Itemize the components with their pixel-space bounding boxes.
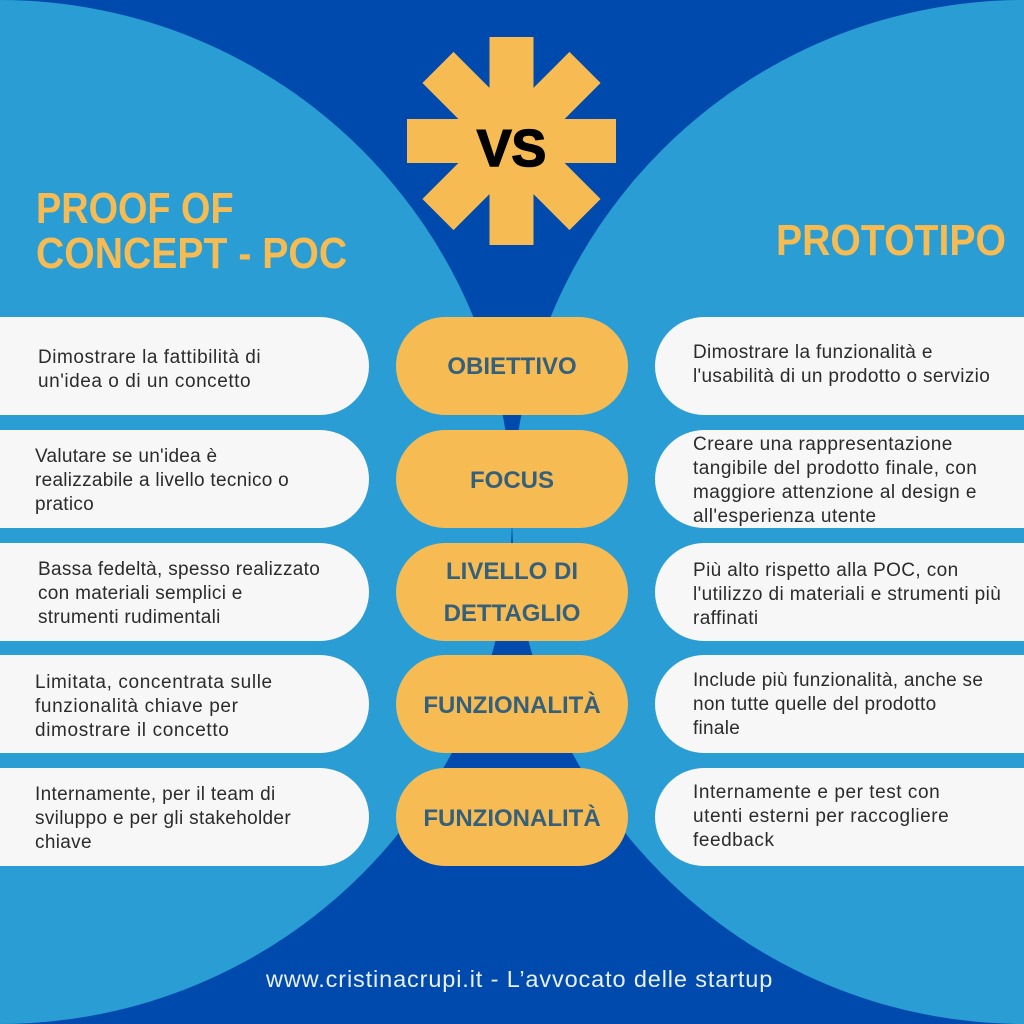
left text: focus: realizzabile a livello tecnico o — [35, 470, 289, 491]
heading: prototipo: PROTOTIPO — [776, 216, 1006, 265]
right text: focus: Creare una rappresentazione — [693, 434, 953, 455]
left text: obiettivo — [38, 347, 261, 392]
center label: obiettivo — [396, 317, 628, 415]
right text: utenti: Internamente e per test con — [693, 782, 940, 803]
right text: funzionalita: finale — [693, 718, 740, 739]
heading: proof of concept — [36, 184, 347, 278]
left pill: utenti — [0, 768, 369, 866]
right text: utenti: utenti esterni per raccogliere — [693, 806, 949, 827]
left pill: funzionalita — [0, 655, 369, 753]
right text: dettaglio: Più alto rispetto alla POC, con — [693, 560, 959, 581]
center label: livello di dettaglio: DETTAGLIO — [444, 600, 580, 627]
left text: dettaglio: strumenti rudimentali — [38, 607, 221, 628]
right text: utenti: feedback — [693, 830, 775, 851]
right text: focus: all'esperienza utente — [693, 506, 877, 527]
right text: funzionalita: Include più funzionalità, anche se — [693, 670, 983, 691]
center label: funzionalita — [396, 655, 628, 753]
right text: dettaglio: raffinati — [693, 608, 758, 629]
left text: dettaglio: con materiali semplici e — [38, 583, 243, 604]
right text: utenti — [693, 782, 949, 851]
center label: funzionalita 2 — [396, 768, 628, 866]
left text: utenti — [35, 784, 291, 853]
left text: dettaglio: Bassa fedeltà, spesso realizzato — [38, 559, 320, 580]
left text: utenti: Internamente, per il team di — [35, 784, 276, 805]
left text: funzionalita: dimostrare il concetto — [35, 720, 229, 741]
left text: dettaglio — [38, 559, 320, 628]
center label: livello di dettaglio — [396, 543, 628, 641]
left text: obiettivo: un'idea o di un concetto — [38, 371, 251, 392]
left text: funzionalita — [35, 672, 273, 741]
center label: focus: FOCUS — [470, 467, 554, 494]
left text: focus — [35, 446, 289, 515]
right pill: funzionalita — [655, 655, 1024, 753]
left text: funzionalita: Limitata, concentrata sulle — [35, 672, 273, 693]
left text: funzionalita: funzionalità chiave per — [35, 696, 239, 717]
right pill: focus — [655, 430, 1024, 528]
right text: obiettivo: l'usabilità di un prodotto o servizio — [693, 366, 990, 387]
right pill: utenti — [655, 768, 1024, 866]
right text: focus: tangibile del prodotto finale, con — [693, 458, 977, 479]
center label: obiettivo: OBIETTIVO — [447, 353, 577, 380]
left text: focus: pratico — [35, 494, 94, 515]
right text: funzionalita: non tutte quelle del prodotto — [693, 694, 936, 715]
right text: focus — [693, 434, 977, 527]
center label: funzionalita: FUNZIONALITÀ — [423, 692, 601, 719]
right text: dettaglio: l'utilizzo di materiali e strumenti più — [693, 584, 1001, 605]
heading: proof of concept: PROOF OF — [36, 184, 234, 233]
center label: focus — [396, 430, 628, 528]
left text: utenti: chiave — [35, 832, 92, 853]
icon: vs asterisk badge — [407, 37, 616, 245]
left text: focus: Valutare se un'idea è — [35, 446, 217, 467]
right pill: dettaglio — [655, 543, 1024, 641]
right text: dettaglio — [693, 560, 1001, 629]
left text: utenti: sviluppo e per gli stakeholder — [35, 808, 291, 829]
right text: obiettivo: Dimostrare la funzionalità e — [693, 342, 933, 363]
icon: vs asterisk badge: VS — [477, 120, 546, 178]
left pill: focus — [0, 430, 369, 528]
center label: funzionalita 2: FUNZIONALITÀ — [423, 805, 601, 832]
left pill: obiettivo — [0, 317, 369, 415]
right text: funzionalita — [693, 670, 983, 739]
right pill: obiettivo — [655, 317, 1024, 415]
center label: livello di dettaglio: LIVELLO DI — [446, 558, 578, 585]
right text: focus: maggiore attenzione al design e — [693, 482, 977, 503]
left text: obiettivo: Dimostrare la fattibilità di — [38, 347, 261, 368]
left pill: dettaglio — [0, 543, 369, 641]
footer: www.cristinacrupi.it - L’avvocato delle startup — [266, 966, 773, 992]
heading: proof of concept: CONCEPT - POC — [36, 229, 347, 278]
right text: obiettivo — [693, 342, 990, 387]
